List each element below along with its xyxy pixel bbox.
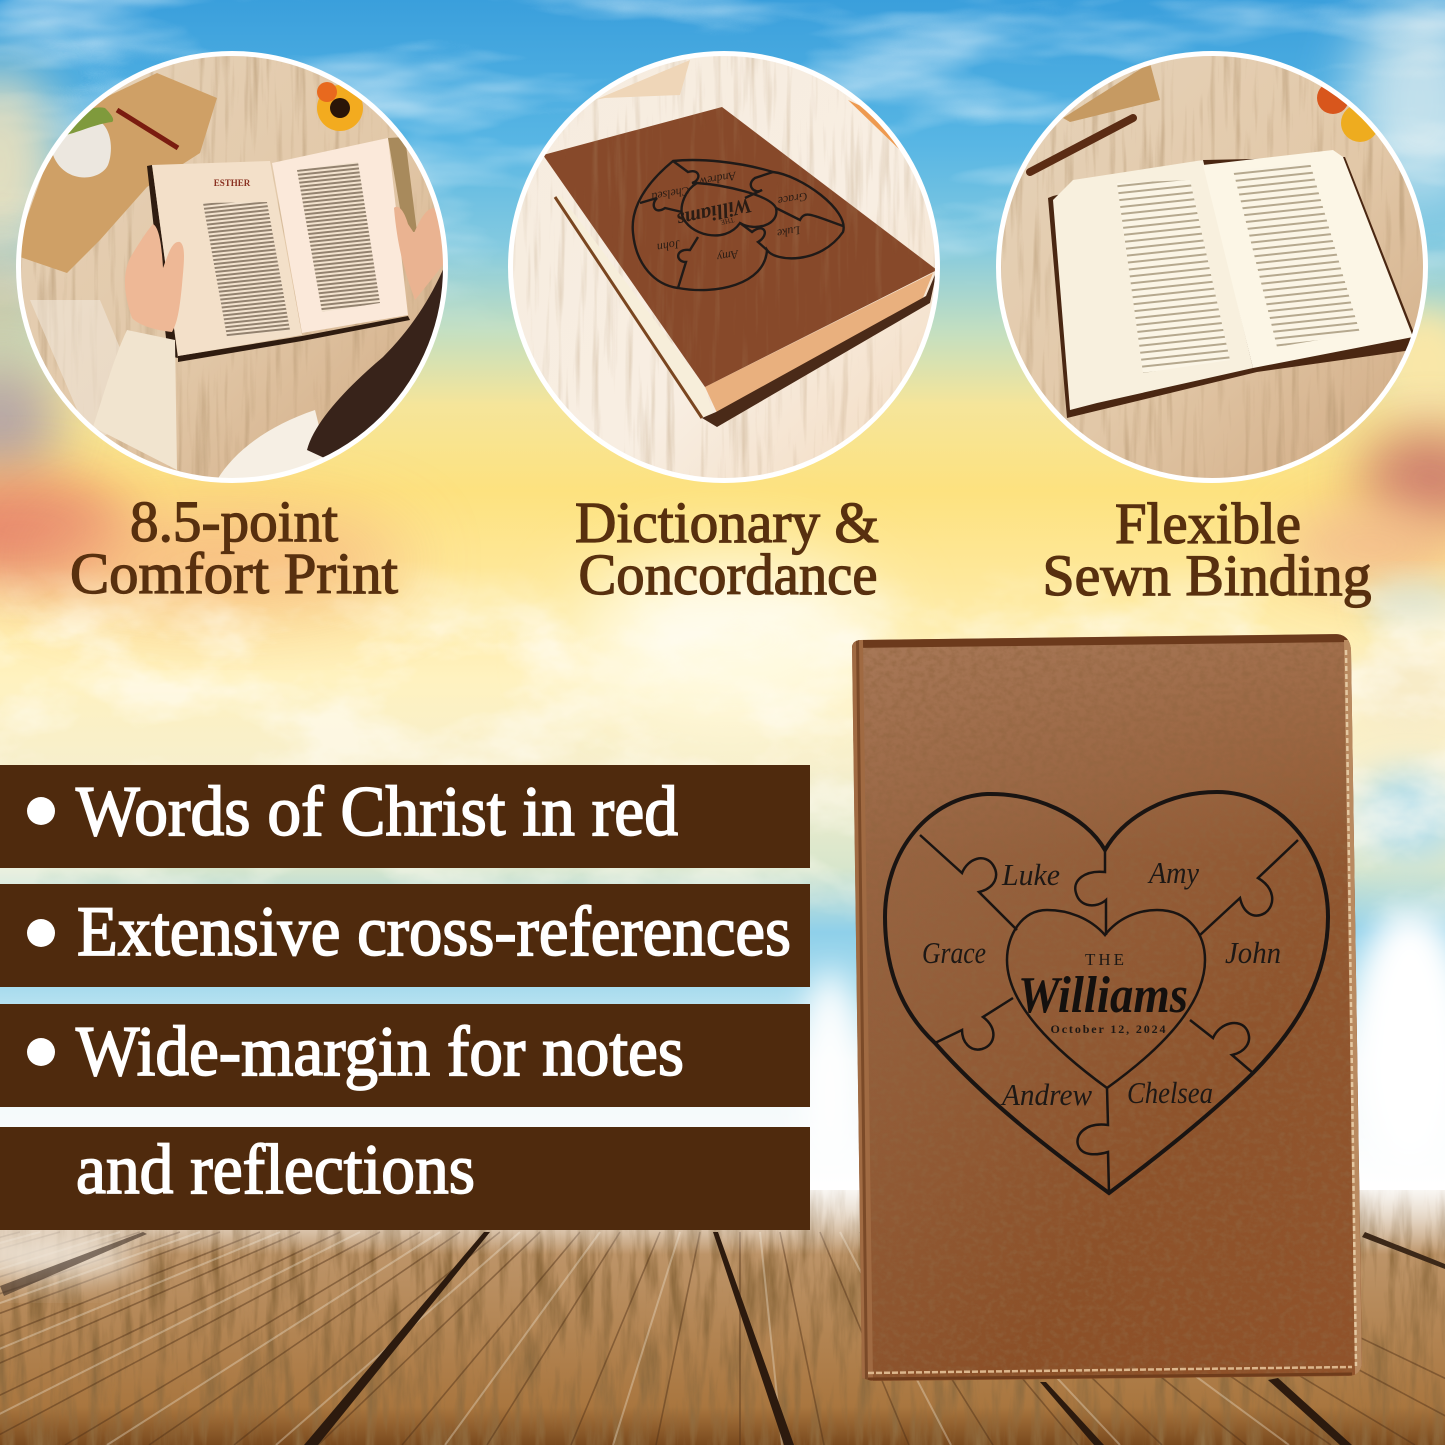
left page	[1053, 160, 1253, 410]
leather cover	[543, 107, 937, 387]
back cover	[702, 270, 937, 427]
heart engraving names	[652, 172, 807, 260]
book back cover	[147, 165, 410, 362]
photo circle: reading the Bible	[16, 50, 450, 490]
engraved names: October 12, 2024	[1050, 1022, 1166, 1036]
burlap corner	[1063, 63, 1160, 122]
text blocks	[203, 202, 290, 337]
feature bar: cross-references: Extensive cross-references	[77, 893, 791, 971]
sweater	[218, 410, 323, 478]
left hand	[125, 224, 184, 332]
page edge	[562, 201, 708, 404]
heart engraving names: Williams	[675, 193, 754, 233]
engraved names: Amy	[1147, 855, 1199, 890]
caption: Dictionary & Concordance	[575, 490, 879, 607]
caption: 8.5-point Comfort Print	[70, 489, 398, 606]
heart engraving names: Grace	[776, 189, 809, 209]
engraved names: Williams	[1018, 967, 1188, 1024]
engraved puzzle heart	[885, 792, 1328, 1193]
book cover	[1048, 157, 1416, 418]
burlap cloth	[20, 73, 217, 273]
heart engraving names: Amy	[715, 247, 740, 265]
heart engraving names: Luke	[775, 223, 802, 241]
feature bar: and reflections	[0, 1127, 810, 1230]
page edge block	[388, 137, 417, 232]
hair	[307, 265, 450, 462]
sleeve	[93, 330, 177, 470]
sunflower	[317, 82, 363, 131]
engraved names: John	[1225, 935, 1281, 970]
heart engraving	[633, 160, 844, 290]
heart engraving names: John	[656, 237, 681, 255]
feature bar: words of Christ	[0, 765, 810, 868]
engraved names: THE	[1085, 950, 1127, 969]
feature bar: words of Christ: Words of Christ in red	[76, 773, 678, 851]
heart engraving names: Chelsea	[650, 184, 691, 204]
feature bar: wide-margin: Wide-margin for notes	[76, 1013, 684, 1091]
photo circle: reading the Bible: ESTHER	[214, 178, 251, 188]
caption: Flexible Sewn Binding: Sewn Binding	[1042, 543, 1372, 608]
leather Bible cover	[850, 630, 1365, 1385]
caption: Dictionary & Concordance: Concordance	[578, 542, 878, 607]
feature bar: cross-references	[0, 884, 810, 987]
engraved names: Chelsea	[1127, 1075, 1213, 1110]
photo circle: closed Bible with heart	[508, 50, 940, 483]
caption: 8.5-point Comfort Print: 8.5-point	[130, 489, 338, 554]
engraved names: Luke	[1001, 857, 1060, 892]
engraved names	[922, 855, 1281, 1112]
caption: Flexible Sewn Binding	[1042, 491, 1372, 608]
flower	[1317, 82, 1379, 142]
right hand	[394, 207, 445, 300]
table: wooden planks	[0, 1190, 1445, 1445]
engraved names: Grace	[922, 935, 986, 970]
feature bar: and reflections: and reflections	[76, 1131, 475, 1209]
vase	[53, 124, 111, 178]
pen	[117, 110, 178, 148]
heart engraving names: THE	[720, 216, 735, 226]
caption: Flexible Sewn Binding: Flexible	[1115, 491, 1301, 556]
feature bar: wide-margin	[0, 1004, 810, 1107]
right page	[1203, 150, 1413, 368]
gilded fore-edge	[705, 273, 933, 415]
leaf	[68, 107, 114, 135]
left page	[152, 161, 302, 356]
caption: Dictionary & Concordance: Dictionary &	[575, 490, 879, 555]
heart engraving names: Andrew	[698, 169, 738, 189]
photo circle: open Bible flat	[996, 50, 1428, 483]
engraved names: Andrew	[1000, 1077, 1092, 1112]
pen	[1030, 118, 1133, 172]
caption: 8.5-point Comfort Print: Comfort Print	[70, 541, 398, 606]
right page	[272, 138, 408, 333]
